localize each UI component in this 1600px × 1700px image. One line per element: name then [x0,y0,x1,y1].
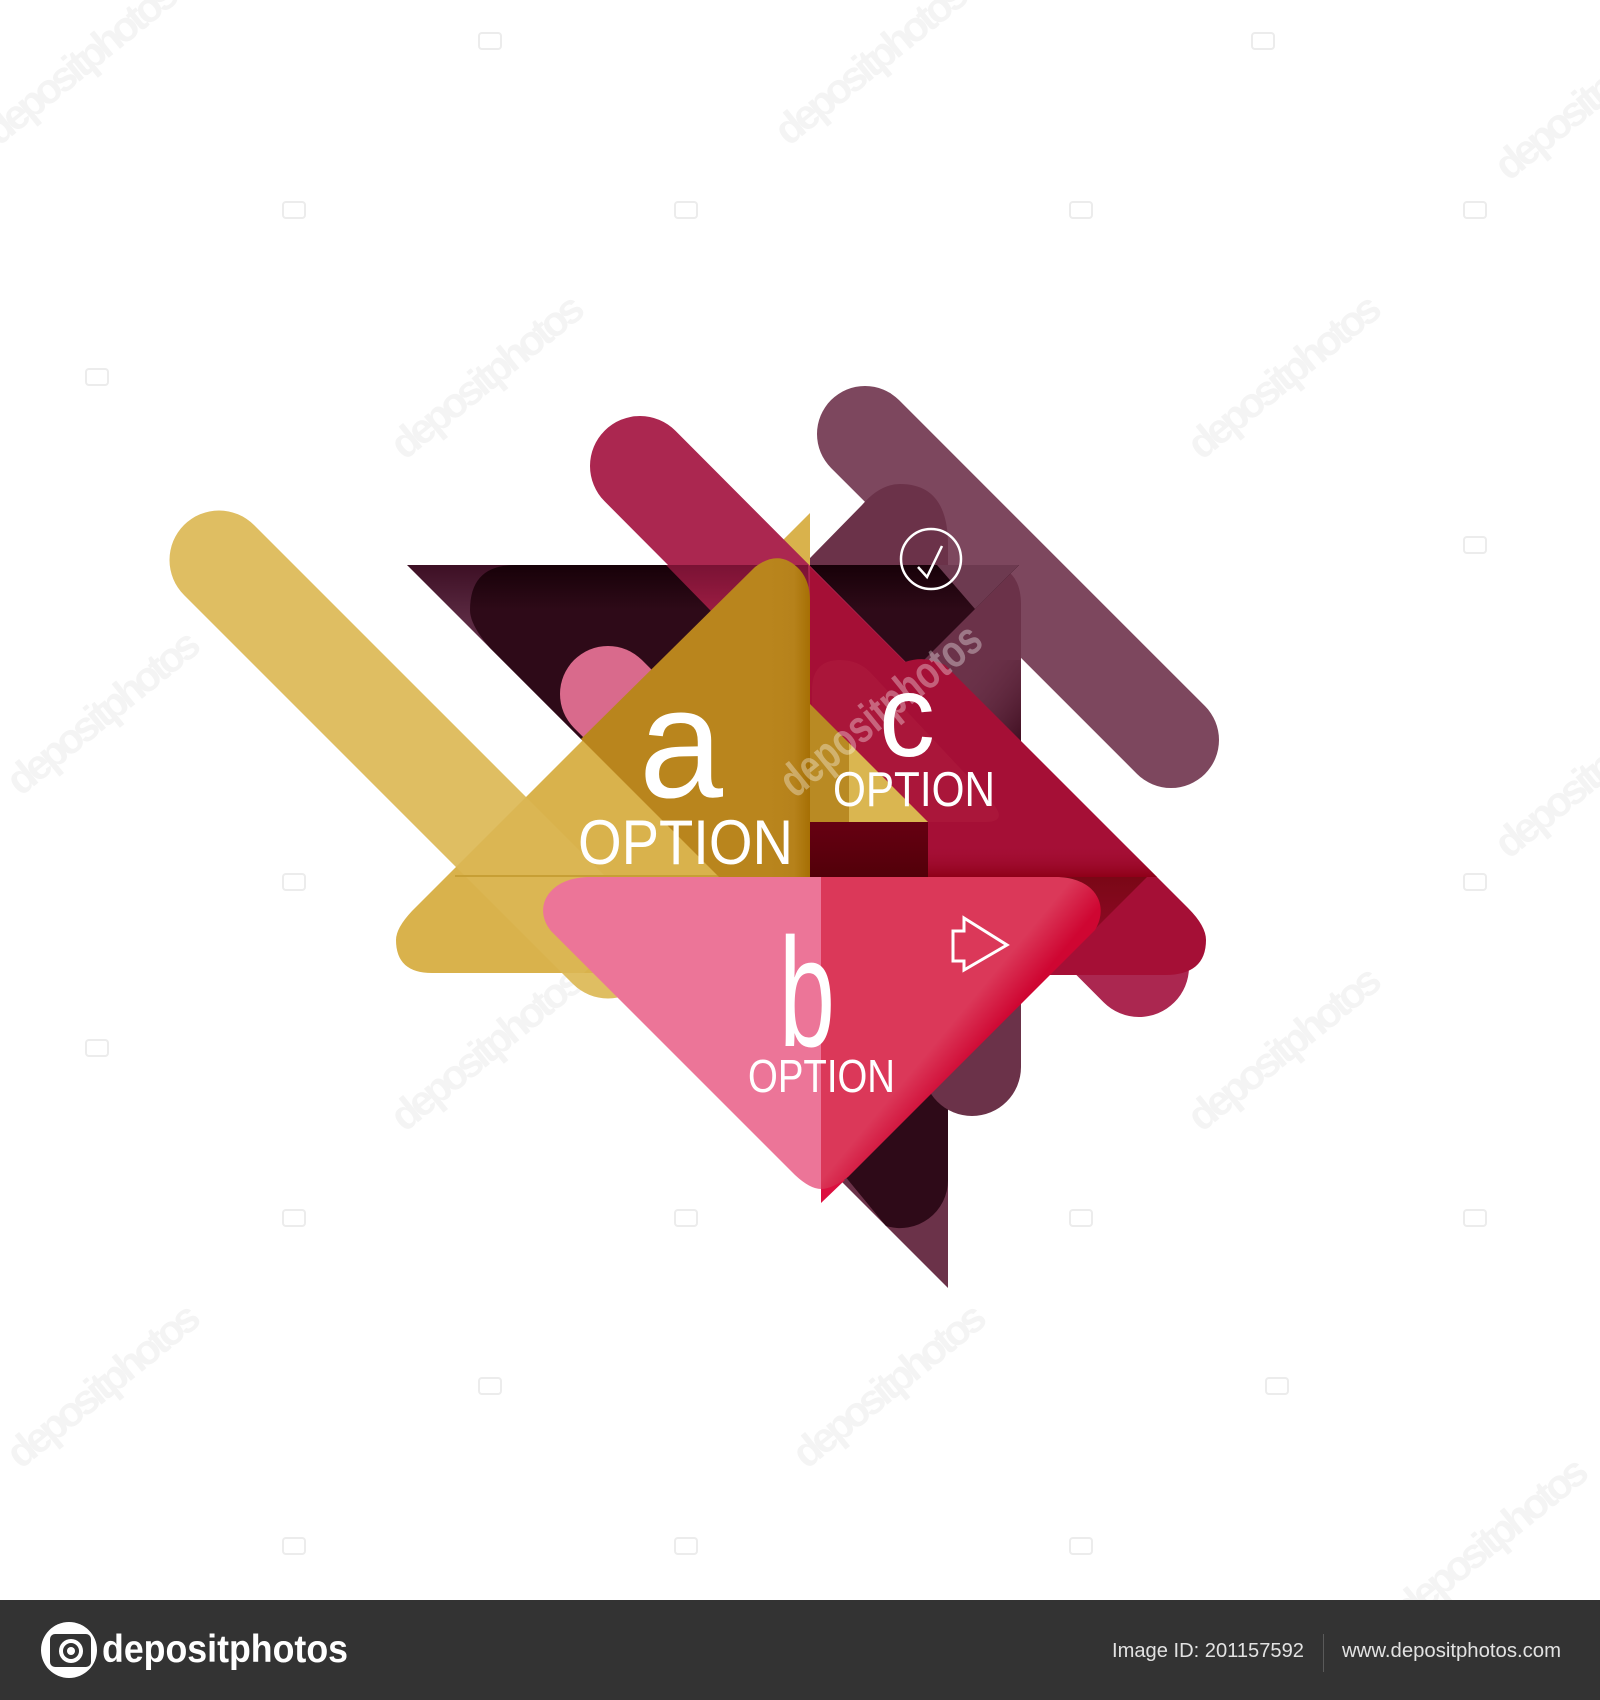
dark maroon top triangle [407,565,1019,871]
faint camera marks [86,33,1486,1554]
pink capsule [608,694,720,806]
faint watermarks: depositphotos [1178,956,1390,1140]
crimson diagonal bar [640,466,1139,967]
yellow small triangle under c [810,704,928,822]
dark red box [810,822,928,877]
mauve capsule bar [865,434,1171,740]
letter a: a [639,656,724,831]
soft rounded triangle behind c [812,660,999,822]
yellow diagonal bar [219,560,608,949]
letter c: c [879,650,935,781]
option label c: OPTION [833,763,995,817]
faint watermarks: depositphotos [381,284,593,468]
footer bar [0,1600,1600,1700]
website url: www.depositphotos.com [1341,1640,1561,1662]
faint watermarks: depositphotos [0,1293,209,1477]
faint watermarks: depositphotos [0,620,209,804]
dark mauve triangle with tall vertical edge [517,484,948,1288]
icon: outlined arrow [953,918,1007,970]
option label a: OPTION [578,808,793,878]
dark mauve vertical capsule [850,565,1021,1116]
dark rounded end at bottom tip [700,1000,948,1228]
letter b: b [779,906,835,1079]
faint watermarks: depositphotos [1385,1447,1597,1631]
central watermark: depositphotos [769,612,992,807]
yellow large triangle [396,513,810,973]
logo icon: camera in circle [41,1622,97,1678]
pink triangle b [543,877,1101,1203]
faint watermarks: depositphotos [381,956,593,1140]
crimson large triangle [810,567,1206,975]
faint watermarks: depositphotos [1178,284,1390,468]
image id: Image ID: 201157592 [1112,1640,1304,1662]
option label b: OPTION [748,1050,895,1102]
crimson bar section over dark triangle [666,565,810,640]
icon: check in circle [901,529,961,589]
dark red wedge beside pink triangle [1000,877,1147,975]
faint watermarks: depositphotos [783,1293,995,1477]
logo wordmark: depositphotos [102,1628,348,1671]
golden brown rounded triangle [581,558,810,877]
